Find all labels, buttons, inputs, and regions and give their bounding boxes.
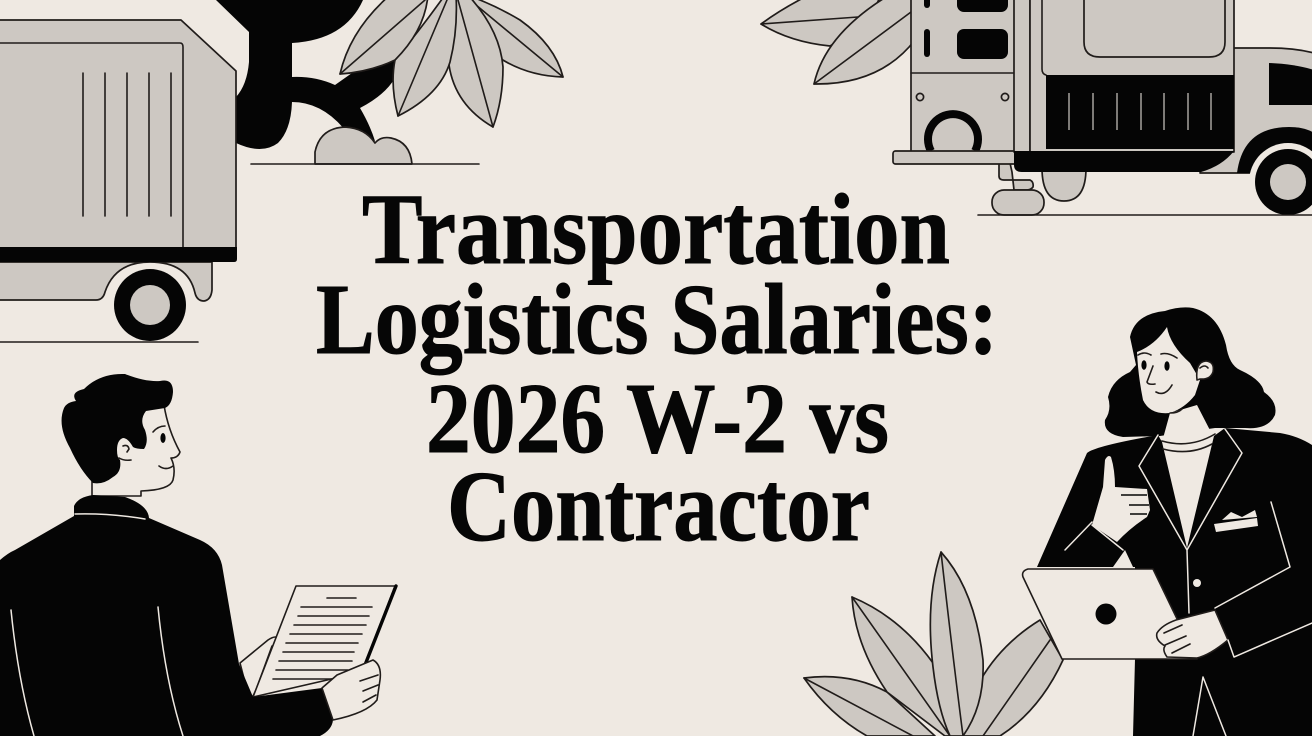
icon: top right leaves: [761, 0, 915, 84]
truck ground line: [0, 341, 198, 343]
cab wheel gap: [1249, 143, 1312, 221]
man hair: [62, 374, 173, 483]
man back hand: [240, 637, 279, 702]
machine rivets: [916, 93, 924, 101]
machine vents: [924, 0, 1008, 59]
woman lower hand: [1157, 610, 1228, 658]
icon: left delivery truck: [0, 20, 237, 342]
woman shirt collar: [1162, 434, 1215, 452]
title: Transportation: [362, 173, 950, 285]
woman lapel seams: [1065, 429, 1290, 736]
icon: bottom right leaves: [804, 552, 1063, 736]
figure: man holding document: [0, 374, 396, 736]
icon: top centre leaves: [340, 0, 563, 127]
woman ear: [1197, 361, 1213, 380]
cab window: [1269, 63, 1312, 105]
truck door: [0, 43, 183, 247]
man jacket seams: [11, 514, 183, 736]
title: 2026 W-2 vs: [426, 362, 889, 474]
truck window: [1084, 0, 1225, 57]
man jacket: [0, 495, 333, 736]
title: [316, 173, 998, 562]
title: Contractor: [447, 450, 870, 562]
figure: woman with laptop: [1023, 307, 1312, 736]
truck cargo panel: [1030, 0, 1234, 152]
truck cab body: [1200, 48, 1312, 173]
truck door ribs: [83, 73, 171, 216]
icon: bush and ground line by tree: [251, 127, 479, 164]
man brow and smile: [153, 426, 173, 468]
woman hair: [1105, 307, 1276, 437]
truck cargo box: [0, 20, 236, 250]
man ear: [119, 445, 131, 460]
machine ring wheel: [928, 114, 978, 151]
man front hand: [322, 660, 380, 720]
woman pocket square: [1214, 510, 1258, 532]
support feet: [999, 163, 1033, 190]
man neck and face: [92, 400, 180, 496]
truck black grille: [1046, 75, 1234, 149]
truck skirt: [0, 262, 212, 301]
document text lines: [273, 598, 372, 679]
shelf: [893, 151, 1023, 164]
man eye: [160, 433, 166, 443]
woman jacket: [1037, 428, 1312, 736]
right truck ground line: [978, 214, 1312, 216]
truck black chassis bar: [0, 247, 237, 262]
icon: right truck with machine box: [893, 0, 1312, 221]
woman features: [1138, 353, 1208, 413]
cab wheel: [1255, 149, 1312, 215]
woman neck and shirt: [1162, 405, 1214, 545]
truck side strip: [1014, 0, 1030, 152]
cab wheel arch: [1237, 127, 1312, 173]
woman sleeve cuff seam: [1228, 623, 1312, 657]
icon: black tree: [216, 0, 395, 149]
woman raised hand: [1092, 456, 1150, 542]
truck black base: [1014, 151, 1234, 172]
woman jacket button: [1193, 579, 1201, 587]
woman laptop: [1023, 569, 1197, 659]
title: Logistics Salaries:: [316, 263, 998, 375]
machine box: [911, 0, 1015, 152]
woman face: [1137, 327, 1200, 413]
truck wheel: [114, 269, 186, 341]
document: [253, 586, 396, 697]
